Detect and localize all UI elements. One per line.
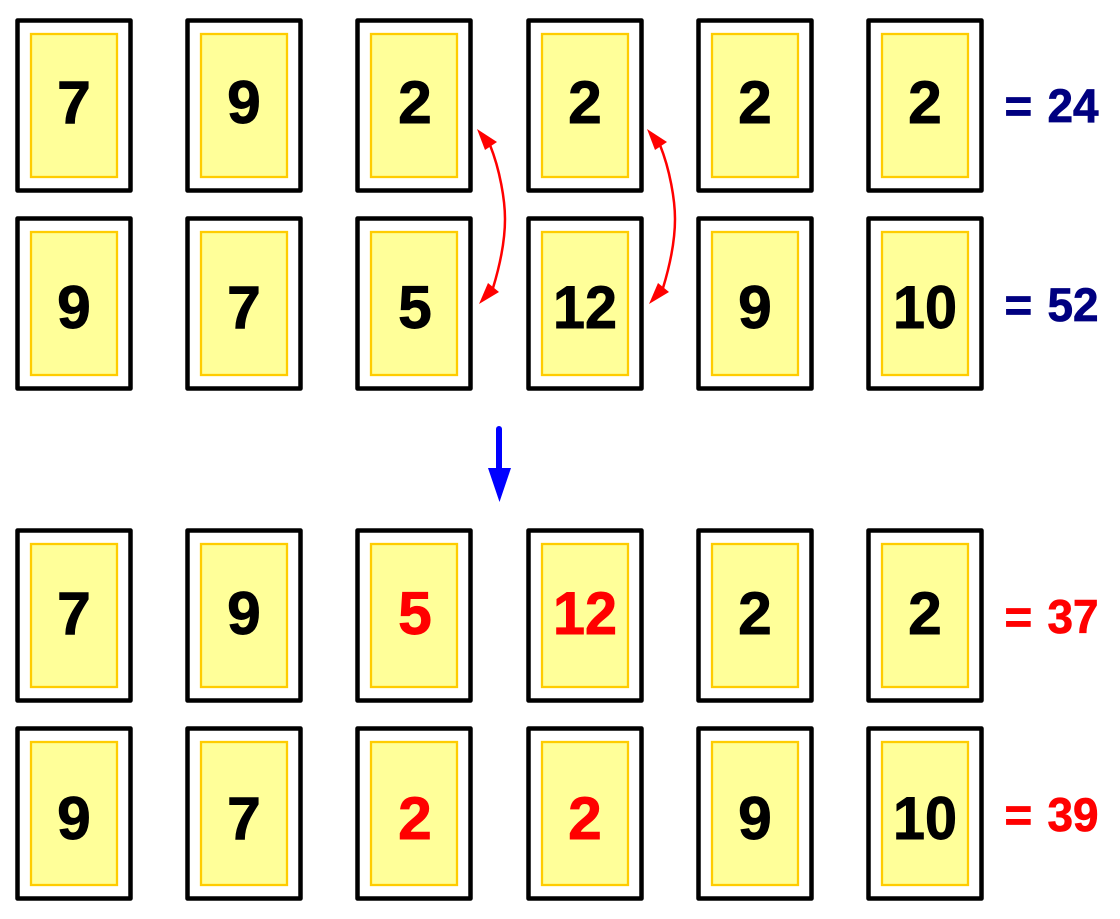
row 2 cards: 12: [553, 273, 617, 341]
row 1 cards: 2: [738, 68, 772, 136]
row 2 cards: [18, 218, 982, 388]
row 3 cards: 7: [57, 579, 91, 647]
row 2 cards: 9: [738, 273, 772, 341]
row 1 cards: 2: [568, 68, 602, 136]
row 1 cards: [18, 20, 982, 190]
row 1 cards: 2: [908, 68, 942, 136]
row 2 cards: 10: [893, 273, 957, 341]
row 3 cards: 5: [398, 579, 432, 647]
arrow: swap column 4: [647, 129, 675, 304]
sum: row 2: =: [1004, 279, 1032, 332]
row 4 cards: 10: [893, 784, 957, 852]
row 1 cards: 9: [227, 68, 261, 136]
row 4 cards: 2: [568, 784, 602, 852]
sum: row 3: =: [1004, 591, 1032, 644]
row 3 cards: 2: [908, 579, 942, 647]
row 3 cards: [18, 530, 982, 700]
row 3 cards: 9: [227, 579, 261, 647]
sum: row 2: 52: [1048, 279, 1098, 332]
row 1 cards: 7: [57, 68, 91, 136]
sum: row 4: 39: [1048, 789, 1098, 842]
row 1 cards: 2: [398, 68, 432, 136]
sum: row 2: [1004, 279, 1098, 332]
row 2 cards: 5: [398, 273, 432, 341]
row 2 cards: 7: [227, 273, 261, 341]
row 3 cards: 12: [553, 579, 617, 647]
row 4 cards: 2: [398, 784, 432, 852]
row 2 cards: 9: [57, 273, 91, 341]
sum: row 1: =: [1004, 80, 1032, 133]
row 4 cards: 9: [57, 784, 91, 852]
row 4 cards: [18, 728, 982, 898]
row 3 cards: 2: [738, 579, 772, 647]
sum: row 1: 24: [1048, 80, 1099, 133]
row 4 cards: 7: [227, 784, 261, 852]
sum: row 4: =: [1004, 789, 1032, 842]
sum: row 4: [1004, 789, 1098, 842]
arrow: swap column 3: [477, 129, 505, 304]
sum: row 3: [1004, 591, 1098, 644]
arrow: down to result: [488, 429, 511, 502]
sum: row 3: 37: [1048, 591, 1098, 644]
sum: row 1: [1004, 80, 1099, 133]
row 4 cards: 9: [738, 784, 772, 852]
